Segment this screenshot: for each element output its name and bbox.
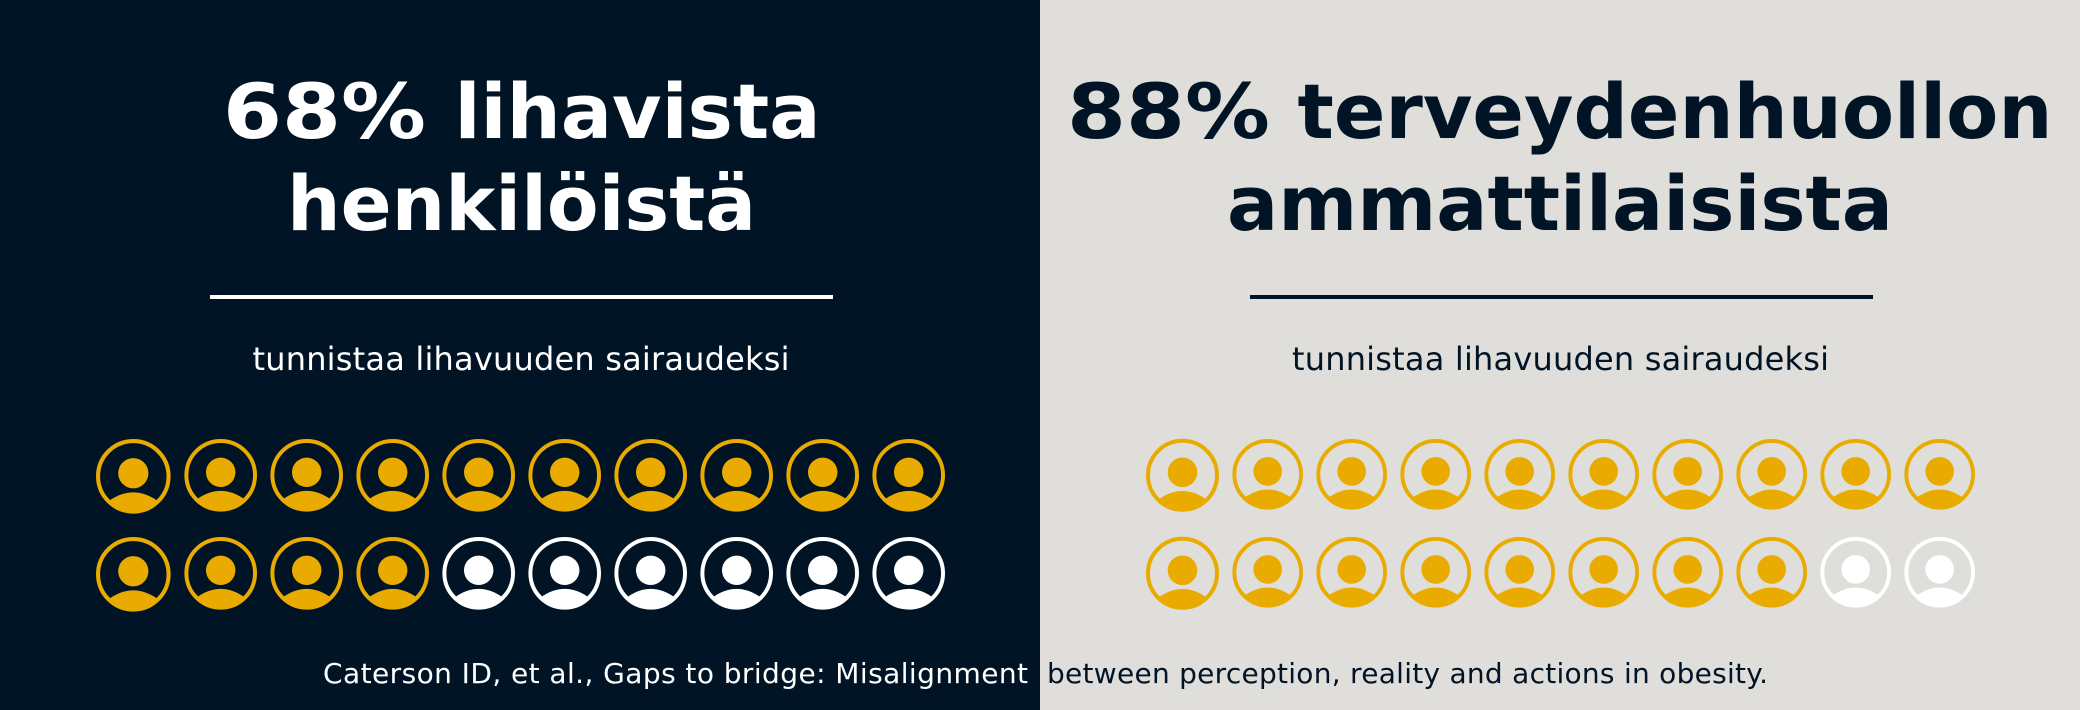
icon: person gold: [1570, 441, 1637, 508]
icon: person gold: [788, 441, 857, 510]
heading: 88% of healthcare professionals: terveydenhuollon: [1298, 67, 2052, 156]
icon: person gold: [1234, 539, 1301, 606]
icon row: left row 2, 4 gold and 6 white: [98, 539, 943, 610]
icon: person gold: [616, 441, 685, 510]
text: left subheading: tunnistaa lihavuuden sairaudeksi: [252, 340, 790, 378]
icon: person gold: [1570, 539, 1637, 606]
icon: person gold: [1822, 441, 1889, 508]
icon: person gold: [1654, 441, 1721, 508]
icon: person gold: [1318, 441, 1385, 508]
heading: 68% of people with obesity: 68%: [223, 67, 426, 156]
icon: person white: [444, 539, 513, 608]
icon: person white: [788, 539, 857, 608]
icon: person gold: [272, 539, 341, 608]
icon: person gold: [98, 539, 169, 610]
panel: left dark background: [0, 0, 1040, 710]
icon row: left row 1, 10 gold: [98, 441, 943, 512]
icon: person white: [874, 539, 943, 608]
divider: right: [1250, 295, 1873, 299]
icon: person gold: [874, 441, 943, 510]
heading: 88% of healthcare professionals: [1067, 67, 2052, 248]
icon: person gold: [272, 441, 341, 510]
icon: person gold: [1738, 539, 1805, 606]
icon: person white: [1906, 539, 1973, 606]
icon: person gold: [1654, 539, 1721, 606]
icon: person gold: [530, 441, 599, 510]
heading: 68% of people with obesity: henkilöistä: [287, 159, 756, 248]
icon row: right row 2, 8 gold and 2 white: [1148, 539, 1973, 608]
icon: person gold: [444, 441, 513, 510]
heading: 68% of people with obesity: [223, 67, 820, 248]
icon: person gold: [358, 441, 427, 510]
icon: person gold: [186, 539, 255, 608]
citation: left part: Caterson ID, et al., Gaps to bridge: Misalignment: [323, 657, 1028, 690]
icon: person gold: [1486, 539, 1553, 606]
heading: 88% of healthcare professionals: 88%: [1067, 67, 1270, 156]
icon: person gold: [1486, 441, 1553, 508]
icon: person white: [1822, 539, 1889, 606]
icon: person gold: [1402, 539, 1469, 606]
icon: person gold: [358, 539, 427, 608]
icon: person white: [702, 539, 771, 608]
text: right subheading: tunnistaa lihavuuden sairaudeksi: [1292, 340, 1829, 378]
icon: person gold: [1148, 539, 1217, 608]
icon: person gold: [1738, 441, 1805, 508]
citation: right part: between perception, reality and actions in obesity.: [1047, 657, 1768, 690]
icon: person gold: [186, 441, 255, 510]
heading: 68% of people with obesity: lihavista: [454, 67, 820, 156]
icon: person gold: [1148, 441, 1217, 510]
icon: person white: [616, 539, 685, 608]
heading: 88% of healthcare professionals: ammattilaisista: [1227, 159, 1893, 248]
icon: person gold: [1318, 539, 1385, 606]
icon: person gold: [1234, 441, 1301, 508]
panel: right light background: [1040, 0, 2080, 710]
icon: person gold: [98, 441, 169, 512]
icon: person gold: [1402, 441, 1469, 508]
icon row: right row 1, 10 gold: [1148, 441, 1973, 510]
icon: person gold: [702, 441, 771, 510]
icon: person gold: [1906, 441, 1973, 508]
divider: left: [210, 295, 833, 299]
icon: person white: [530, 539, 599, 608]
